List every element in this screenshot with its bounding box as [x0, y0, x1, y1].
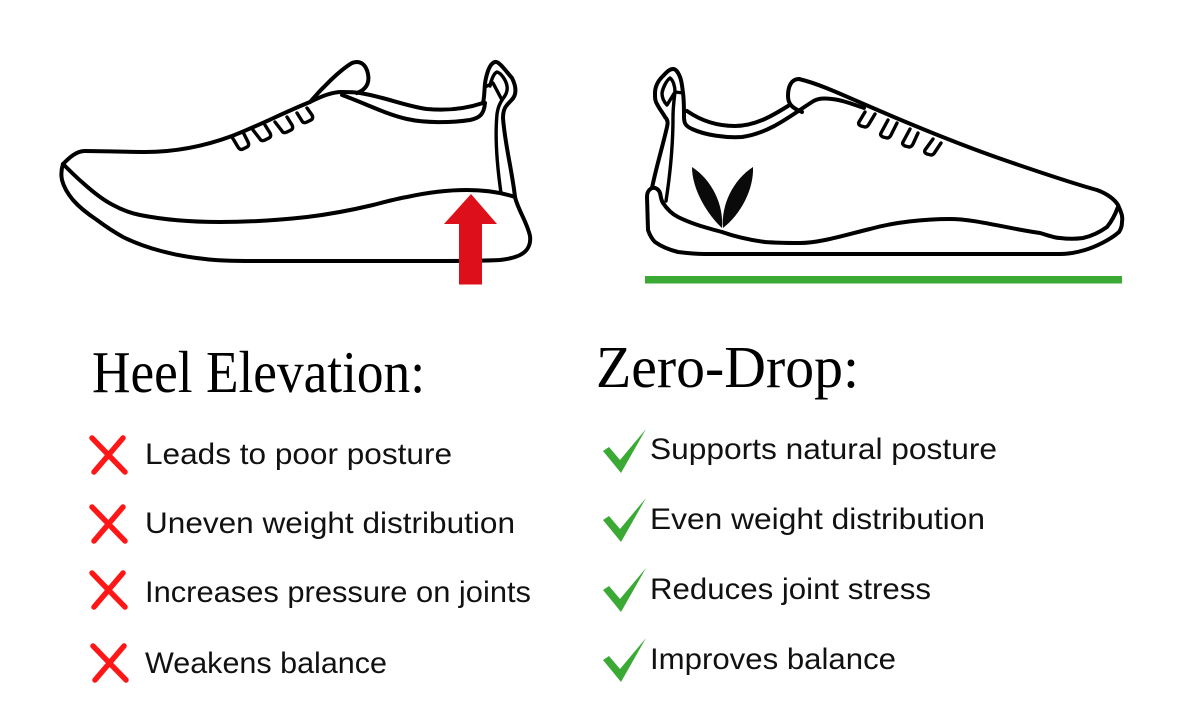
arrow: heel lift [444, 194, 497, 284]
text: natural posture: Supports natural posture [650, 433, 997, 466]
text: pressure: Increases pressure on joints [145, 576, 531, 609]
icon: cross 1 [92, 438, 125, 472]
icon: cross 2 [92, 507, 125, 541]
icon: cross 4 [93, 646, 126, 680]
laces [232, 108, 313, 149]
text: even weight: Even weight distribution [650, 503, 985, 536]
list: heel elevation drawbacks [92, 438, 531, 680]
text: balance: Weakens balance [145, 647, 387, 680]
icon: check 1 [603, 429, 646, 473]
illustration: elevated heel shoe [61, 62, 530, 261]
text: poor posture: Leads to poor posture [145, 438, 452, 471]
icon: check 3 [603, 568, 646, 612]
ground line [645, 276, 1122, 284]
heading: Zero-Drop: Zero-Drop: [596, 334, 859, 400]
icon: check 2 [603, 498, 646, 542]
icon: leaf logo [692, 167, 753, 228]
text: improves balance: Improves balance [650, 643, 896, 676]
heading: Heel Elevation: Heel Elevation: [92, 339, 425, 405]
laces [859, 112, 941, 155]
text: uneven weight: Uneven weight distribution [145, 507, 515, 540]
illustration: zero-drop shoe [647, 69, 1122, 254]
icon: cross 3 [92, 573, 125, 607]
icon: check 4 [603, 638, 646, 682]
list: zero-drop benefits [603, 429, 997, 682]
text: joint stress: Reduces joint stress [650, 573, 931, 606]
